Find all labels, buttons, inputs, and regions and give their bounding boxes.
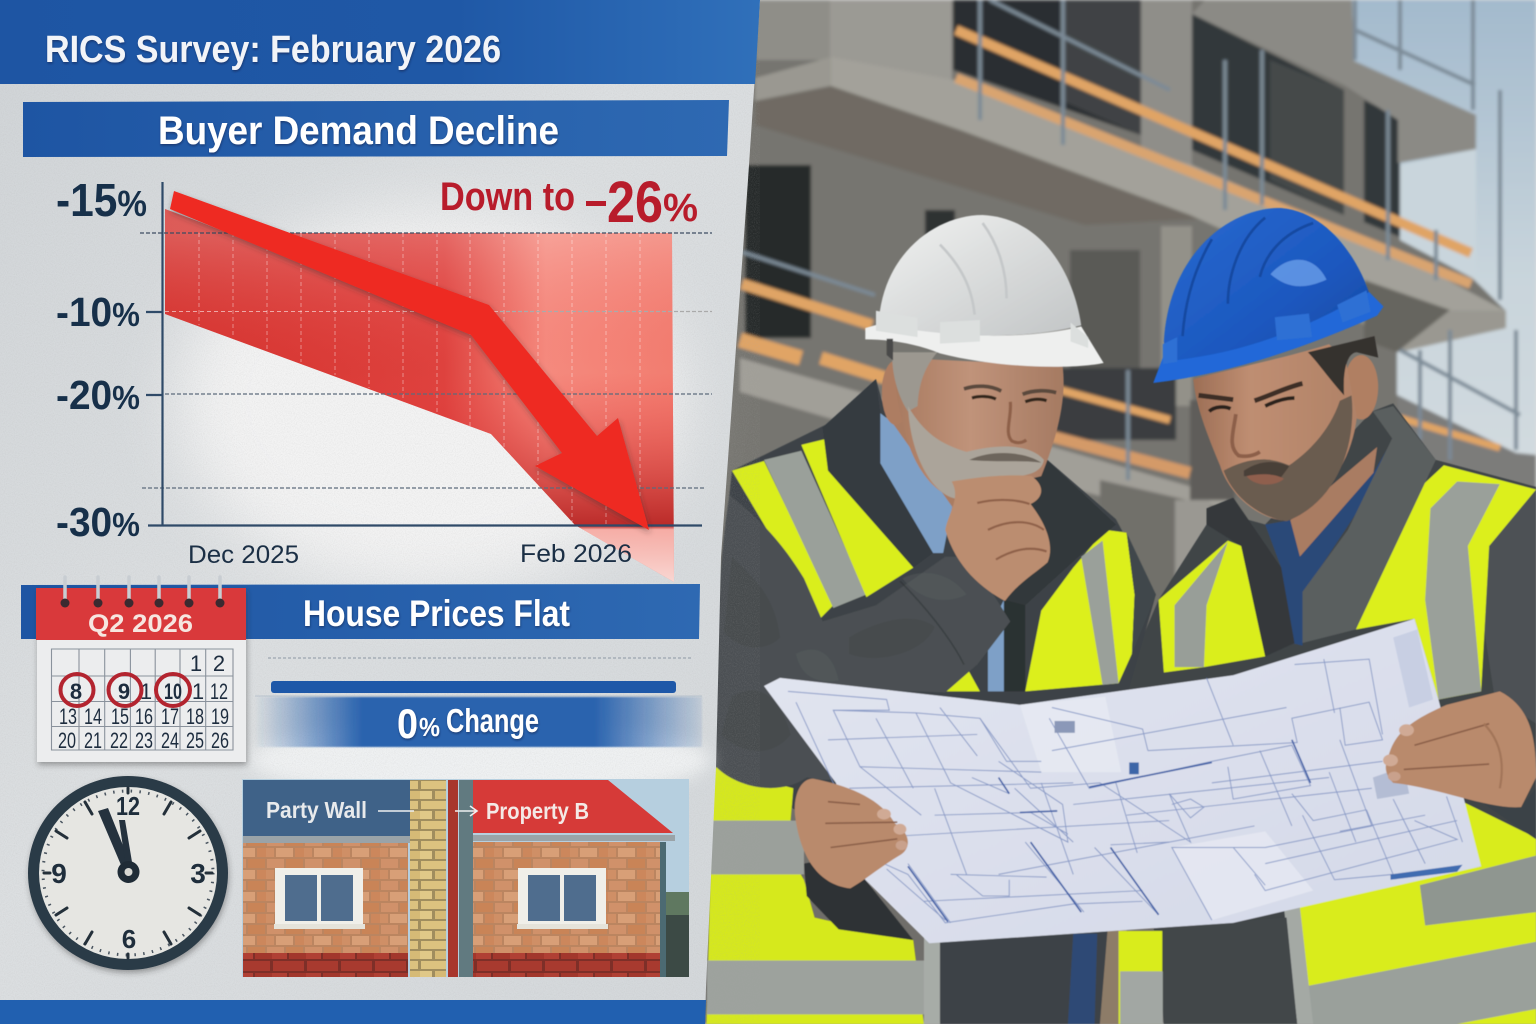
icon: calendar Q2 2026: 26	[211, 728, 229, 753]
icon: calendar Q2 2026: 20	[58, 728, 76, 753]
right house	[473, 780, 689, 977]
icon: calendar Q2 2026: 12	[210, 679, 228, 704]
heading: buyer demand decline: Buyer Demand Decline	[158, 109, 559, 153]
icon: calendar Q2 2026: 13	[59, 704, 77, 729]
icon: calendar Q2 2026: 9	[118, 679, 130, 704]
callout: down to -26%: Down to	[440, 175, 575, 219]
callout: down to -26%	[440, 170, 698, 235]
icon: wall clock: 3	[190, 858, 206, 889]
label: property B: Property B	[486, 798, 589, 824]
heading: house prices flat: House Prices Flat	[303, 593, 570, 634]
worker right: head and blue hard hat	[1153, 208, 1384, 521]
icon: wall clock	[28, 776, 228, 970]
worker left: hand holding blueprint	[795, 779, 908, 888]
arrow: party wall pointer	[378, 806, 477, 816]
icon: calendar Q2 2026: 25	[186, 728, 204, 753]
icon: calendar Q2 2026: 17	[161, 704, 179, 729]
icon: wall clock: 6	[122, 924, 136, 954]
header bar	[0, 0, 760, 84]
icon: calendar Q2 2026: 1	[192, 679, 204, 704]
section banner: house prices	[21, 584, 700, 639]
shaded decline area	[165, 209, 674, 582]
blueprint sheet	[764, 619, 1481, 943]
y axis labels: -20%	[56, 372, 140, 418]
left house	[243, 780, 410, 977]
y axis labels: -15%	[56, 174, 147, 226]
background ground between workers	[1095, 928, 1127, 1024]
x axis labels	[188, 540, 632, 569]
chart: buyer demand decline	[56, 170, 712, 582]
worker left: torso, vest and jacket	[706, 379, 1156, 1024]
section banner: buyer demand	[23, 100, 729, 157]
icon: wall clock: 12	[116, 791, 140, 821]
icon: calendar Q2 2026: 23	[135, 728, 153, 753]
party wall column	[410, 780, 473, 977]
icon: calendar Q2 2026: 2	[213, 651, 225, 676]
band: 0% change: %	[419, 712, 440, 742]
icon: calendar Q2 2026: 1	[190, 651, 202, 676]
y axis labels	[56, 174, 147, 545]
x axis labels: Feb 2026	[520, 540, 632, 568]
worker right: torso and jacket	[1119, 403, 1536, 1024]
worker left: thinking hand	[945, 475, 1050, 601]
worker right: hand holding blueprint	[1383, 691, 1536, 807]
icon: calendar Q2 2026: 24	[161, 728, 179, 753]
icon: calendar Q2 2026: 22	[110, 728, 128, 753]
icon: calendar Q2 2026: 14	[84, 704, 102, 729]
axes	[146, 182, 702, 526]
callout: down to -26%: %	[663, 186, 698, 230]
icon: calendar Q2 2026: 18	[186, 704, 204, 729]
icon: calendar Q2 2026: 19	[211, 704, 229, 729]
footer bar	[0, 1000, 706, 1024]
worker left: head and white hard hat	[865, 215, 1104, 499]
illustration: party wall houses	[242, 779, 689, 977]
band: 0% change: Change	[446, 702, 539, 739]
flat price bar	[255, 658, 702, 696]
y axis labels: -10%	[56, 289, 140, 335]
band: 0% change	[255, 697, 702, 747]
icon: wall clock: 9	[51, 858, 67, 889]
title: RICS Survey: February 2026	[45, 29, 501, 71]
photo: construction site background	[700, 0, 1536, 1024]
icon: calendar Q2 2026: 8	[70, 679, 82, 704]
label: party wall: Party Wall	[266, 797, 367, 823]
worker left: jacket arm	[716, 495, 1010, 788]
icon: calendar Q2 2026: 16	[135, 704, 153, 729]
icon: calendar Q2 2026: 10	[164, 679, 182, 704]
callout: down to -26%: 26	[607, 170, 663, 235]
x axis labels: Dec 2025	[188, 541, 299, 569]
icon: calendar Q2 2026: 1	[140, 679, 152, 704]
y axis labels: -30%	[56, 499, 140, 545]
icon: calendar Q2 2026	[36, 577, 246, 762]
panel: left infographic sheet	[0, 0, 760, 1024]
band: 0% change: 0	[397, 700, 418, 747]
icon: calendar Q2 2026: 21	[84, 728, 102, 753]
icon: calendar Q2 2026: Q2 2026	[88, 610, 193, 638]
red arrow	[170, 191, 649, 530]
photo: two workers reading a blueprint	[706, 208, 1536, 1024]
icon: calendar Q2 2026: 15	[111, 704, 129, 729]
